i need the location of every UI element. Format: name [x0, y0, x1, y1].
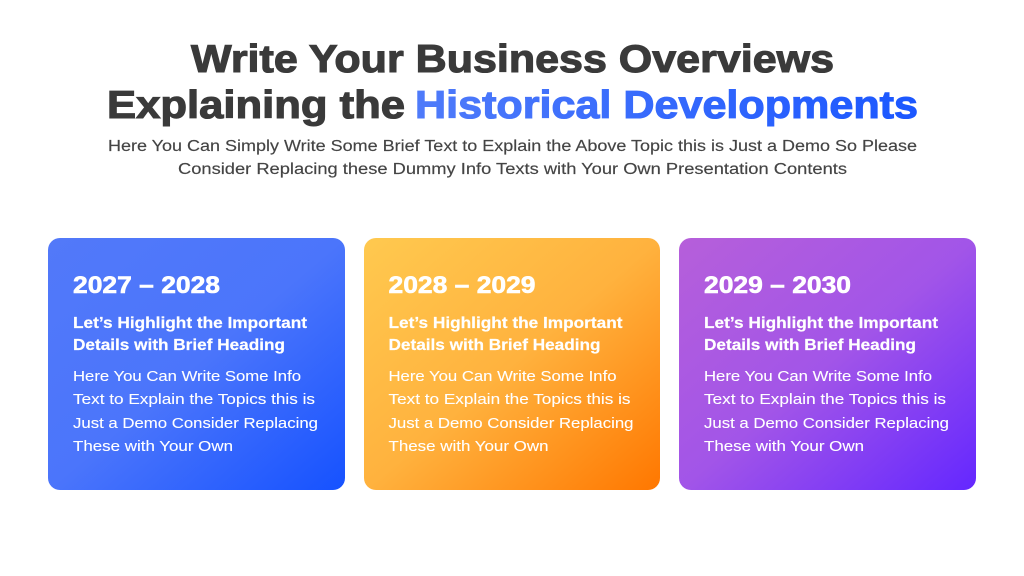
card heading: Details with Brief Heading: [73, 337, 285, 354]
title: Explaining the: [107, 84, 405, 127]
subtitle text: Consider Replacing these Dummy Info Texts with Your Own Presentation Contents: [178, 161, 847, 178]
card heading: Let’s Highlight the Important: [73, 315, 307, 332]
title: Write Your Business Overviews: [191, 38, 834, 81]
panel: 2027 – 2028: [48, 238, 345, 490]
year heading: 2029 – 2030: [704, 272, 851, 299]
card body text: Here You Can Write Some Info: [388, 368, 616, 385]
card heading: [704, 315, 938, 354]
card body text: Just a Demo Consider Replacing: [388, 415, 634, 432]
panel: 2029 – 2030: [679, 238, 976, 490]
card heading: Let’s Highlight the Important: [704, 315, 938, 332]
title: Historical Developments: [415, 84, 918, 127]
card body text: Just a Demo Consider Replacing: [704, 415, 949, 432]
card heading: Details with Brief Heading: [388, 337, 600, 354]
card body text: [388, 368, 634, 455]
card heading: Let’s Highlight the Important: [388, 315, 622, 332]
card body text: Text to Explain the Topics this is: [73, 391, 315, 408]
card heading: Details with Brief Heading: [704, 337, 916, 354]
title: [107, 38, 918, 127]
card body text: [704, 368, 949, 455]
card body text: Here You Can Write Some Info: [704, 368, 932, 385]
panel: 2028 – 2029: [364, 238, 660, 490]
card heading: [73, 315, 307, 354]
card body text: Text to Explain the Topics this is: [704, 391, 946, 408]
subtitle text: [108, 138, 917, 178]
subtitle text: Here You Can Simply Write Some Brief Text to Explain the Above Topic this is Just a Demo So Please: [108, 138, 917, 155]
card body text: These with Your Own: [704, 438, 864, 455]
card body text: [73, 368, 318, 455]
card body text: These with Your Own: [388, 438, 548, 455]
card body text: Just a Demo Consider Replacing: [73, 415, 318, 432]
card body text: Text to Explain the Topics this is: [388, 391, 630, 408]
year heading: 2027 – 2028: [73, 272, 220, 299]
card heading: [388, 315, 622, 354]
card body text: These with Your Own: [73, 438, 233, 455]
card body text: Here You Can Write Some Info: [73, 368, 301, 385]
year heading: 2028 – 2029: [388, 272, 536, 299]
